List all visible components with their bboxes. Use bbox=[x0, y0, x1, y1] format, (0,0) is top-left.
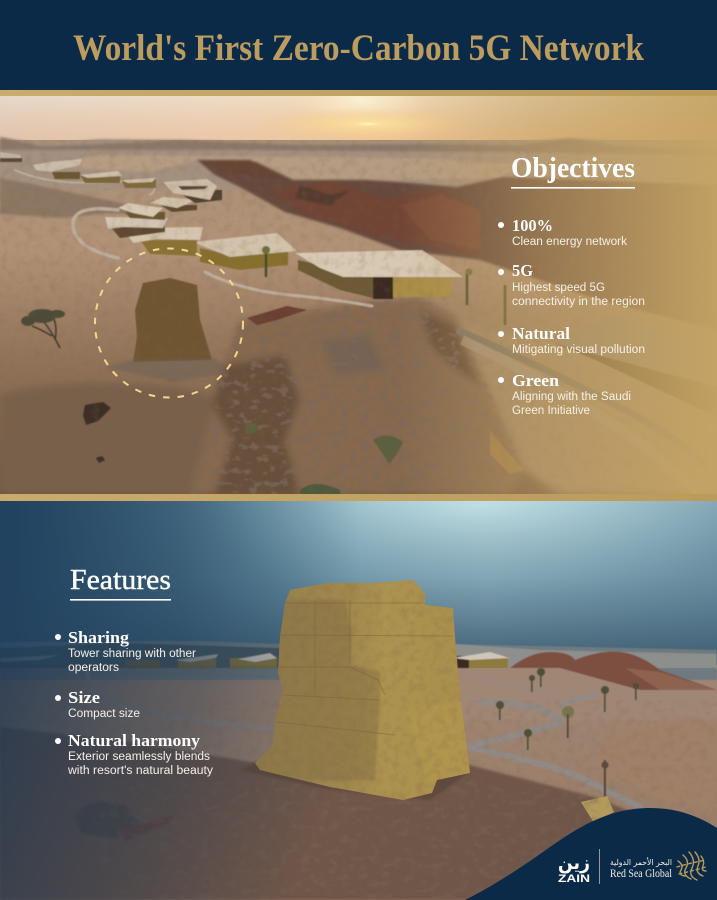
icon: red sea global emblem bbox=[677, 852, 706, 880]
ground texture bbox=[271, 700, 639, 820]
objective: natural: Mitigating visual pollution bbox=[512, 344, 645, 356]
stone tower in ring bbox=[105, 278, 230, 382]
heading: objectives: Objectives bbox=[511, 152, 635, 184]
objective: 100%: Clean energy network bbox=[512, 236, 627, 248]
feature: size: Size bbox=[68, 688, 100, 707]
feature: sharing: Tower sharing with other bbox=[68, 648, 196, 660]
feature: size: Compact size bbox=[68, 708, 140, 720]
scrub and planter bbox=[75, 796, 614, 842]
feature: natural harmony: Natural harmony bbox=[68, 731, 201, 750]
foreground dark ground bbox=[0, 729, 628, 900]
panel: objectives bbox=[498, 152, 645, 417]
feature: sharing bbox=[55, 628, 196, 674]
roads bbox=[15, 170, 372, 306]
navy gradient overlay bbox=[0, 501, 360, 665]
dashed ring marker bbox=[95, 248, 243, 398]
feature: size bbox=[55, 688, 140, 720]
objective: green: Aligning with the Saudi bbox=[512, 391, 631, 403]
objective: green: Green bbox=[512, 371, 560, 390]
logo: zain bbox=[558, 852, 590, 885]
objective: 5G: connectivity in the region bbox=[512, 296, 645, 308]
heading: features: Features bbox=[70, 564, 171, 596]
right side building and terrace bbox=[456, 284, 688, 420]
logo: zain: ZAIN bbox=[558, 873, 590, 885]
hill patches bbox=[190, 297, 530, 497]
ground texture bbox=[2, 140, 462, 420]
feature: sharing: Sharing bbox=[68, 628, 130, 647]
divider band: top bbox=[0, 90, 717, 96]
objective: green: Green Initiative bbox=[512, 405, 590, 417]
objective: green bbox=[498, 371, 631, 417]
divider band: middle bbox=[0, 494, 717, 501]
feature: sharing: operators bbox=[68, 662, 119, 674]
red mountains bbox=[196, 158, 695, 318]
distant plains and ridges bbox=[0, 136, 632, 188]
resort buildings bbox=[0, 152, 472, 325]
roads, resort bbox=[87, 672, 640, 807]
shrubs and trees bbox=[496, 668, 639, 798]
patches on sand bbox=[83, 402, 111, 463]
panel: features bbox=[55, 564, 213, 777]
objective: natural bbox=[498, 324, 645, 356]
objective: natural: Natural bbox=[512, 324, 570, 343]
logo panel: wave bbox=[465, 808, 717, 900]
objective: 5G: Highest speed 5G bbox=[512, 282, 605, 294]
logo: red sea global: Red Sea Global bbox=[610, 868, 672, 880]
photo: resort at sunset bbox=[0, 72, 717, 500]
feature: natural harmony: with resort's natural beauty bbox=[67, 765, 213, 777]
feature: natural harmony bbox=[55, 731, 213, 777]
small tree bbox=[21, 309, 65, 348]
logo: red sea global bbox=[610, 857, 672, 880]
logo: zain: زين bbox=[558, 852, 590, 874]
objective: 5G bbox=[498, 261, 645, 308]
gold gradient overlay bbox=[400, 96, 717, 494]
disguised tower rock bbox=[240, 580, 475, 805]
logo: red sea global: البحر الأحمر الدولية bbox=[610, 857, 672, 867]
objective: 100% bbox=[498, 216, 627, 248]
foreground hill bbox=[0, 297, 717, 494]
objective: 5G: 5G bbox=[512, 261, 533, 280]
title: World's First Zero-Carbon 5G Network bbox=[73, 28, 644, 69]
resort buildings, distant bbox=[0, 652, 510, 668]
horizon and hills bbox=[0, 641, 717, 690]
header banner bbox=[0, 0, 717, 90]
shrubs, hill bbox=[245, 422, 524, 496]
objective: 100%: 100% bbox=[512, 216, 553, 235]
feature: natural harmony: Exterior seamlessly blends bbox=[68, 751, 210, 763]
photo: stone tower at dusk bbox=[0, 501, 717, 900]
left sand hill bbox=[0, 178, 128, 219]
